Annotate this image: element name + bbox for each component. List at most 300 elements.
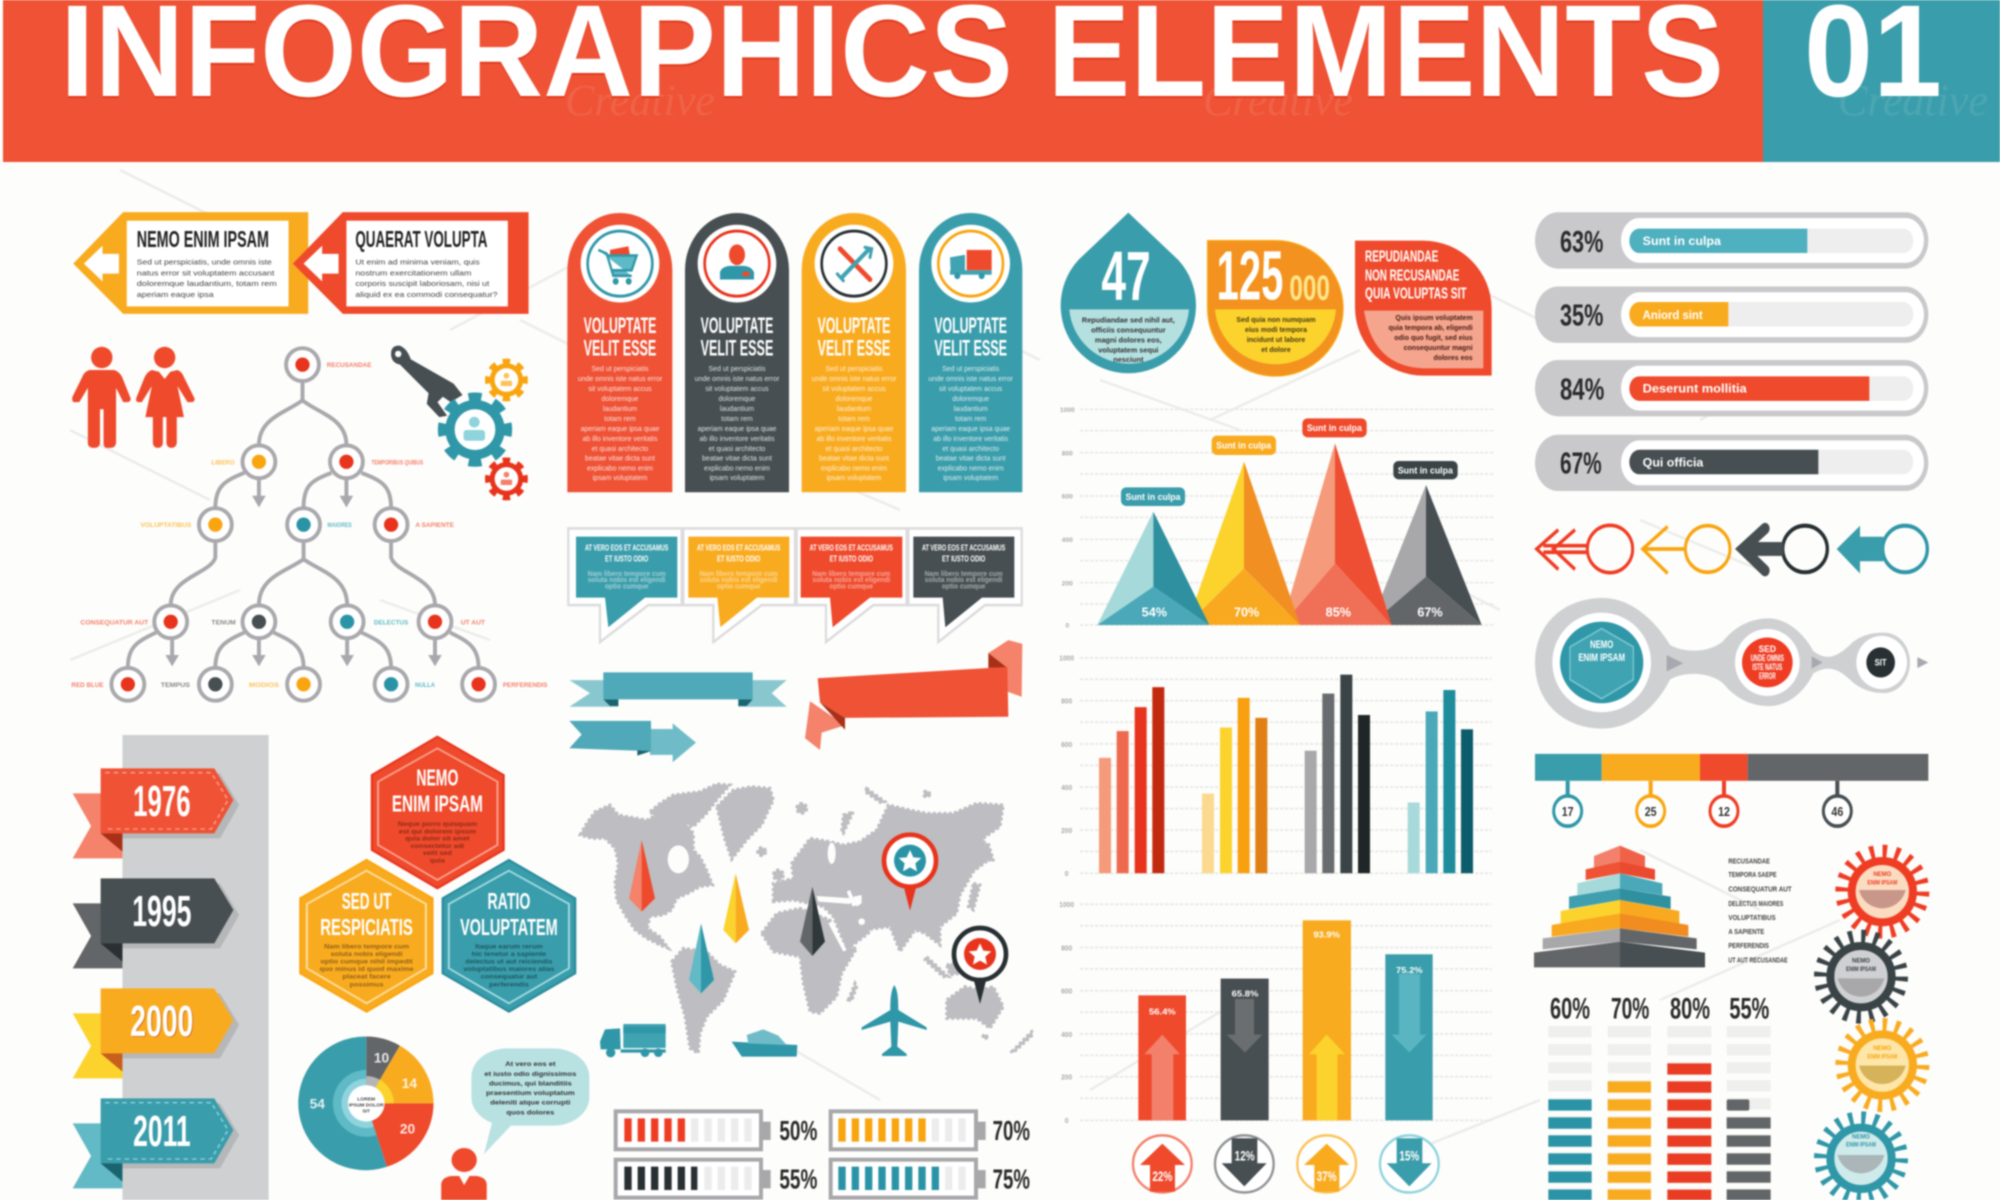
third column top: drops and triangle chart xyxy=(1060,213,1493,630)
red bars xyxy=(1099,687,1164,873)
pie chart: 14 xyxy=(402,1076,417,1091)
flow blob xyxy=(1535,598,1928,729)
drop: orange 125 000 xyxy=(1208,236,1343,376)
yellow arrow tag: doloremque laudantium, totam rem xyxy=(137,279,277,288)
ribbon: red banner xyxy=(805,640,1022,750)
pyramid legend: TEMPORA SAEPE xyxy=(1728,872,1777,879)
bar: yellow up xyxy=(1303,920,1351,1120)
hexagon: red: NEMO xyxy=(416,765,458,791)
icon: person xyxy=(720,244,754,280)
panel: yellow arch: totam rem xyxy=(838,413,870,423)
header banner xyxy=(3,0,2000,162)
drop: orange 125 000: Sed quia non numquam xyxy=(1236,317,1316,324)
pyramid legend: DELECTUS MAIORES xyxy=(1728,901,1784,908)
speech box: red: AT VERO EOS ET ACCUSAMUS xyxy=(810,543,893,553)
progress bar 63%: 63% xyxy=(1560,224,1603,258)
triangle labels: 85% xyxy=(1326,606,1351,620)
progress bar 67% xyxy=(1535,435,1928,491)
right column: progress, arrows, flow, stacked bar xyxy=(1535,212,1928,826)
speech box: red: optio cumque xyxy=(830,583,873,590)
tree arrowheads xyxy=(165,496,442,666)
badge: down 15%: 15% xyxy=(1399,1148,1420,1163)
progress bar 35%: 35% xyxy=(1560,298,1603,332)
sun gear: dark: ENIM IPSAM xyxy=(1846,967,1876,973)
year ribbon 2011: 2011 xyxy=(133,1107,191,1156)
panel: red arch: unde omnis iste natus error xyxy=(578,374,663,383)
badge: down 15% xyxy=(1380,1135,1439,1192)
tree labels: DELECTUS xyxy=(374,620,408,626)
panel: teal arch: Sed ut perspiciatis xyxy=(942,364,999,373)
speech bubble: quos dolores xyxy=(506,1109,554,1116)
progress bar 84%: Deserunt mollitia xyxy=(1643,383,1748,396)
stack column 80%: 80% xyxy=(1670,992,1710,1025)
flow node: teal: NEMO xyxy=(1590,639,1613,651)
tree labels: RED BLUE xyxy=(71,683,104,689)
battery 75%: 75% xyxy=(993,1163,1030,1194)
arrow bars axis: 800 xyxy=(1061,945,1072,952)
pie chart: IPSUM DOLOR xyxy=(349,1102,384,1108)
left lower column: timeline, hexagons, pie, bubble xyxy=(73,735,589,1200)
yellow bars xyxy=(1202,698,1267,873)
panel: teal arch: sit voluptatem accus xyxy=(939,384,1003,393)
yellow arrow tag: NEMO ENIM IPSAM xyxy=(137,226,269,252)
speech box: teal: AT VERO EOS ET ACCUSAMUS xyxy=(585,543,668,553)
world map xyxy=(580,784,1033,1053)
flow node: red: SED xyxy=(1759,645,1776,654)
callout pills xyxy=(1121,418,1458,506)
speech box: dark: soluta nobis est eligendi xyxy=(925,577,1003,584)
bar: red up xyxy=(1138,995,1186,1120)
tree labels: A SAPIENTE xyxy=(415,523,454,529)
flow node: red: UNDE OMNIS xyxy=(1751,654,1784,663)
speech bubble: At vero eos et xyxy=(505,1060,556,1068)
year ribbon 2000: 2000 xyxy=(130,997,193,1046)
panel: yellow arch xyxy=(802,213,906,492)
panel: red arch xyxy=(567,213,672,492)
pyramid legend xyxy=(1728,859,1792,964)
panel: red arch: doloremque xyxy=(602,394,638,403)
sun gear: teal: ENIM IPSAM xyxy=(1846,1143,1876,1149)
panel: red arch: sit voluptatem accus xyxy=(588,384,652,393)
sun gear: dark xyxy=(1822,937,1900,1016)
battery 50% xyxy=(616,1111,817,1149)
flow node: red: ERROR xyxy=(1759,672,1776,681)
panel: yellow arch: VOLUPTATE xyxy=(818,314,890,338)
bar: yellow up: 93.9% xyxy=(1313,929,1341,940)
progress bar 84%: 84% xyxy=(1560,372,1604,406)
panel: dark arch: totam rem xyxy=(721,413,753,423)
map marker: red xyxy=(629,840,655,912)
panel: red arch: Sed ut perspiciatis xyxy=(591,364,649,373)
stack column 55% xyxy=(1727,992,1769,1200)
speech box: yellow: soluta nobis est eligendi xyxy=(700,577,778,584)
bar: teal down xyxy=(1385,954,1433,1120)
pyramid xyxy=(1534,846,1705,967)
progress bar 63%: Sunt in culpa xyxy=(1643,235,1722,248)
panel: teal arch: et quasi architecto xyxy=(942,443,999,453)
hexagon: red: est qui dolorem ipsum xyxy=(399,829,476,835)
icon: tools xyxy=(837,247,872,281)
chart axis: 600 xyxy=(1062,494,1073,501)
sun gear: teal xyxy=(1822,1119,1900,1198)
flow node: teal xyxy=(1552,613,1651,712)
hexagon: teal: VOLUPTATEM xyxy=(460,915,558,941)
hexagon: yellow xyxy=(300,860,432,1012)
battery 50%: 50% xyxy=(779,1115,817,1146)
triangle labels: 70% xyxy=(1234,606,1259,620)
drop: orange 125 000: 000 xyxy=(1289,269,1330,308)
panel: teal arch: ipsam voluptatem xyxy=(943,473,998,482)
sun gear: yellow: ENIM IPSAM xyxy=(1867,1055,1897,1061)
panel: teal arch: unde omnis iste natus error xyxy=(928,374,1013,383)
icon: red gear xyxy=(488,460,525,497)
tree labels: PERFERENDIS xyxy=(503,683,547,689)
red arrow tag: aliquid ex ea commodi consequatur? xyxy=(355,290,497,299)
panel: dark arch: Sed ut perspiciatis xyxy=(708,364,766,373)
hexagon: red: ENIM IPSAM xyxy=(392,791,483,817)
speech box: yellow xyxy=(683,528,795,642)
progress bar 84% xyxy=(1535,360,1928,416)
callout pills: Sunt in culpa xyxy=(1307,423,1363,433)
left column: tags, people, tree, gears xyxy=(71,212,547,701)
header banner: Creative xyxy=(1203,76,1353,125)
panel: yellow arch: beatae vitae dicta sunt xyxy=(819,453,889,463)
panel: red arch: totam rem xyxy=(604,413,636,423)
drop: orange 125 000: et dolore xyxy=(1261,347,1291,354)
panel: teal arch: aperiam eaque ipsa quae xyxy=(931,423,1010,433)
sun gear: red: NEMO xyxy=(1873,872,1892,878)
speech bubble: deleniti atque corrupti xyxy=(490,1099,570,1106)
yellow arrow tag: aperiam eaque ipsa xyxy=(137,290,215,299)
icon: yellow gear xyxy=(488,361,525,399)
arrow: yellow xyxy=(1643,526,1730,573)
icon: truck xyxy=(600,1024,666,1057)
year ribbon 2011 xyxy=(73,1098,239,1188)
panel: dark arch: beatae vitae dicta sunt xyxy=(702,453,772,463)
panel: teal arch xyxy=(919,213,1022,492)
speech bubble: praesentium voluptatum xyxy=(486,1089,575,1097)
battery 55%: 55% xyxy=(779,1163,817,1194)
sun gear: red: ENIM IPSAM xyxy=(1867,880,1897,886)
bar: teal down: 75.2% xyxy=(1396,965,1423,975)
icon: person xyxy=(441,1148,487,1200)
triangle: red xyxy=(1282,443,1392,625)
stacked bar xyxy=(1535,754,1928,826)
panel: dark arch: VOLUPTATE xyxy=(701,314,773,338)
speech box: teal: optio cumque xyxy=(605,583,649,590)
hexagon: yellow: placeat facere xyxy=(342,974,391,981)
bar: red up: 56.4% xyxy=(1149,1006,1176,1016)
speech bubble xyxy=(471,1048,589,1154)
speech box: red: soluta nobis est eligendi xyxy=(812,577,890,584)
tree labels: MAIORES xyxy=(327,523,352,529)
year ribbon 1995: 1995 xyxy=(132,887,192,936)
panel: teal arch: totam rem xyxy=(955,413,986,423)
panel: dark arch: sit voluptatem accus xyxy=(705,384,769,393)
drop: red text: quia tempora ab, eligendi xyxy=(1388,325,1473,332)
icon: plane xyxy=(862,985,927,1056)
panel: yellow arch: et quasi architecto xyxy=(826,443,882,453)
hexagon: red: quia xyxy=(430,858,445,865)
hexagon: teal: RATIO xyxy=(487,889,530,915)
year ribbon 1976: 1976 xyxy=(133,777,191,826)
tree labels: TEMPORIBUS QUIBUS xyxy=(371,460,423,466)
speech box: red xyxy=(797,528,907,642)
arrow: teal xyxy=(1837,526,1927,573)
yellow arrow tag xyxy=(73,212,308,314)
icon: cart xyxy=(598,246,637,285)
hexagon: red: consectetur adi xyxy=(411,843,464,850)
speech box: dark: Nam libero tempore cum xyxy=(925,571,1003,578)
marker 25: 25 xyxy=(1645,804,1657,819)
arrow bars axis: 1000 xyxy=(1059,902,1074,909)
chart axis: 800 xyxy=(1062,450,1073,457)
speech box: yellow: AT VERO EOS ET ACCUSAMUS xyxy=(697,543,780,553)
flow node: red xyxy=(1735,629,1800,696)
sun gear: yellow: NEMO xyxy=(1873,1046,1892,1052)
badge: up 37% xyxy=(1297,1135,1356,1192)
stack column 55%: 55% xyxy=(1729,992,1769,1025)
red arrow tag: corporis suscipit laboriosam, nisi ut xyxy=(355,279,490,288)
marker 12 xyxy=(1710,781,1738,826)
panel: yellow arch: aperiam eaque ipsa quae xyxy=(815,423,893,433)
stack column 60%: 60% xyxy=(1550,992,1590,1025)
panel: yellow arch: sit voluptatem accus xyxy=(822,384,886,393)
drop: teal 47: officiis consequuntur xyxy=(1091,325,1166,334)
panel: teal arch: ab illo inventore veritatis xyxy=(933,433,1008,443)
speech box: yellow: Nam libero tempore cum xyxy=(700,571,778,578)
hexagon: teal: hic tenetur a sapiente xyxy=(472,951,546,958)
year ribbon 1976 xyxy=(73,768,239,858)
chart axis: 1000 xyxy=(1060,407,1075,414)
callout pills: Sunt in culpa xyxy=(1216,441,1272,451)
map seas xyxy=(668,843,865,952)
drop: teal 47: voluptatem sequi xyxy=(1098,345,1158,354)
drop: red text xyxy=(1355,241,1492,376)
panel: dark arch: ipsam voluptatem xyxy=(710,473,764,482)
panel: teal arch: VOLUPTATE xyxy=(934,314,1007,338)
drop: orange 125 000: incidunt ut labore xyxy=(1247,337,1305,344)
hexagon: teal: perferendis xyxy=(489,982,529,988)
speech box: teal: ET IUSTO ODIO xyxy=(605,554,648,563)
chart: grouped bars xyxy=(1059,656,1492,878)
panel: dark arch: doloremque xyxy=(719,394,755,403)
triangle chart xyxy=(1060,407,1493,630)
panel: red arch: VELIT ESSE xyxy=(584,336,656,361)
callout pills: Sunt in culpa xyxy=(1398,465,1454,475)
hexagon: yellow: soluta nobis eligendi xyxy=(331,951,403,958)
flow node: dark: SIT xyxy=(1875,658,1887,668)
hexagon: yellow: optio cumque nihil impedit xyxy=(320,959,413,966)
hexagon: red: Neque porro quisquam xyxy=(398,821,477,828)
speech box: teal xyxy=(568,528,682,642)
red arrow tag: Ut enim ad minima veniam, quis xyxy=(355,258,480,267)
bars axis: 800 xyxy=(1061,698,1072,706)
triangle labels xyxy=(1142,606,1443,620)
battery 70%: 70% xyxy=(993,1115,1030,1146)
speech box: yellow: optio cumque xyxy=(717,583,761,590)
chart grid xyxy=(1080,409,1493,625)
panel: red arch: ab illo inventore veritatis xyxy=(583,433,658,443)
panel: red arch: et quasi architecto xyxy=(592,443,648,453)
pie chart: 10 xyxy=(374,1050,390,1065)
flow node: red: ISTE NATUS xyxy=(1752,663,1783,672)
bars axis: 1000 xyxy=(1059,656,1074,663)
progress bar 35% xyxy=(1535,287,1928,343)
chart axis: 0 xyxy=(1065,623,1069,630)
speech box: teal: Nam libero tempore cum xyxy=(588,571,666,578)
speech box: red: Nam libero tempore cum xyxy=(812,571,890,578)
hexagon: teal xyxy=(443,860,575,1012)
hexagon: red xyxy=(372,737,504,888)
panel: teal arch: laudantium xyxy=(954,403,988,413)
hexagon: red: quia dolor sit amet xyxy=(405,836,470,843)
tree connectors xyxy=(128,381,479,667)
marker 25 xyxy=(1637,781,1665,826)
panel: red arch: VOLUPTATE xyxy=(584,314,656,338)
hexagon: yellow: Nam libero tempore cum xyxy=(324,944,409,951)
panel: yellow arch: Sed ut perspiciatis xyxy=(825,364,883,373)
panel: red arch: explicabo nemo enim xyxy=(587,463,653,472)
panel: dark arch: ab illo inventore veritatis xyxy=(700,433,775,443)
centre column: arch panels, speech boxes, ribbons xyxy=(567,213,1022,762)
arrow bars axis xyxy=(1059,902,1074,1125)
year ribbon 1995 xyxy=(73,878,239,968)
drop: red text: NON RECUSANDAE xyxy=(1365,268,1459,285)
panel: dark arch: unde omnis iste natus error xyxy=(695,374,780,383)
sun gear: dark: NEMO xyxy=(1852,959,1870,965)
panel: yellow arch: doloremque xyxy=(836,394,872,403)
triangle: teal xyxy=(1097,512,1209,625)
drop: red text: consequuntur magni xyxy=(1404,345,1473,352)
panel: yellow arch: unde omnis iste natus error xyxy=(812,374,897,383)
year ribbon 2000 xyxy=(73,988,239,1078)
dark bars xyxy=(1305,675,1370,873)
icon: wrench and gears xyxy=(391,346,525,497)
tree labels: RECUSANDAE xyxy=(327,363,371,369)
pyramid legend: A SAPIENTE xyxy=(1728,929,1765,936)
hexagon: yellow: RESPICIATIS xyxy=(320,915,413,941)
pyramid legend: PERFERENDIS xyxy=(1728,943,1769,950)
triangle labels: 54% xyxy=(1142,606,1167,620)
right column lower: pyramid, stacks, sun gears xyxy=(1534,846,1922,1200)
flow node: dark xyxy=(1856,636,1907,689)
arrow bars grid xyxy=(1080,904,1492,1120)
triangle labels: 67% xyxy=(1417,606,1443,620)
speech box: dark: AT VERO EOS ET ACCUSAMUS xyxy=(922,543,1005,553)
panel: red arch: laudantium xyxy=(603,403,637,413)
icon: truck xyxy=(950,250,992,279)
pyramid legend: VOLUPTATIBUS xyxy=(1728,915,1776,922)
pie chart: SIT xyxy=(362,1108,370,1114)
ribbon: teal banner xyxy=(569,672,787,707)
hexagon: yellow: possimus xyxy=(350,982,384,988)
chart axis xyxy=(1060,407,1075,630)
tree nodes xyxy=(111,348,495,701)
badge: down 12%: 12% xyxy=(1235,1148,1255,1163)
panel: dark arch: explicabo nemo enim xyxy=(704,463,770,472)
yellow arrow tag: Sed ut perspiciatis, unde omnis iste xyxy=(137,258,272,267)
badge: down 12% xyxy=(1215,1135,1274,1192)
progress bar 63% xyxy=(1535,212,1928,269)
pyramid legend: CONSEQUATUR AUT xyxy=(1728,886,1792,893)
hexagon: teal: consequatur aut xyxy=(481,974,538,981)
speech box: dark: optio cumque xyxy=(942,583,986,590)
sun gear: teal: NEMO xyxy=(1852,1134,1870,1140)
panel: dark arch: laudantium xyxy=(720,403,754,413)
panel: teal arch: VELIT ESSE xyxy=(934,336,1007,361)
yellow arrow tag: natus error sit voluptatem accusant xyxy=(137,268,275,277)
marker 46: 46 xyxy=(1831,804,1844,819)
drop: teal 47: 47 xyxy=(1101,237,1151,315)
map marker: yellow xyxy=(723,873,749,943)
hexagon: teal: voluptatibus maiores alias xyxy=(463,966,555,973)
location pin: red xyxy=(884,835,936,911)
arrow bars axis: 600 xyxy=(1061,988,1072,996)
drop: red text: dolores eos xyxy=(1433,355,1473,362)
bars axis: 200 xyxy=(1061,828,1072,835)
badge: up 22%: 22% xyxy=(1152,1169,1173,1184)
header banner: Creative xyxy=(565,76,715,125)
drop: red text: QUIA VOLUPTAS SIT xyxy=(1365,286,1467,303)
drop: teal 47: Repudiandae sed nihil aut, xyxy=(1082,315,1175,324)
progress bar 35%: Aniord sint xyxy=(1643,309,1703,322)
bars grid xyxy=(1080,658,1492,873)
pie chart: 54 xyxy=(310,1097,325,1112)
teal bars xyxy=(1408,690,1473,873)
drop: red text: odio quo fugit, sed eius xyxy=(1394,335,1473,342)
hexagon: teal: Itaque earum rerum xyxy=(475,944,543,951)
speech box: red: ET IUSTO ODIO xyxy=(830,554,873,563)
panel: yellow arch: ipsam voluptatem xyxy=(827,473,881,482)
speech box: teal: soluta nobis est eligendi xyxy=(588,577,666,584)
progress bar 67%: Qui officia xyxy=(1643,457,1704,470)
triangle: dark xyxy=(1370,485,1482,625)
panel: yellow arch: ab illo inventore veritatis xyxy=(817,433,892,443)
panel: dark arch: et quasi architecto xyxy=(709,443,765,453)
hexagon: yellow: quo minus id quod maxime xyxy=(320,966,414,973)
map marker: dark xyxy=(800,887,825,956)
drop: red text: REPUDIANDAE xyxy=(1365,249,1438,266)
marker 17: 17 xyxy=(1562,804,1574,819)
marker 12: 12 xyxy=(1718,804,1730,819)
chart axis: 400 xyxy=(1062,537,1073,544)
bars axis: 400 xyxy=(1061,785,1072,792)
pie chart: LOREM xyxy=(357,1096,375,1102)
battery 55% xyxy=(616,1160,817,1198)
tree labels: UT AUT xyxy=(461,620,485,626)
panel: yellow arch: explicabo nemo enim xyxy=(821,463,887,472)
chart: arrow bars xyxy=(1059,902,1492,1125)
pyramid legend: UT AUT RECUSANDAE xyxy=(1728,957,1788,964)
drop: orange 125 000: eius modi tempora xyxy=(1245,327,1307,334)
bars axis: 600 xyxy=(1061,742,1072,749)
marker 46 xyxy=(1823,781,1851,826)
pie chart: 20 xyxy=(400,1122,416,1137)
hexagon: teal: delectus ut aut reiciendis xyxy=(465,959,553,966)
location pin: dark xyxy=(954,928,1006,1004)
tree dots xyxy=(121,357,486,691)
bars axis xyxy=(1059,656,1074,878)
marker 17 xyxy=(1554,781,1582,826)
speech bubble: ducimus, qui blanditiis xyxy=(489,1080,572,1087)
map marker: teal xyxy=(689,923,714,993)
progress bar 67%: 67% xyxy=(1560,446,1602,480)
panel: dark arch: VELIT ESSE xyxy=(701,336,773,361)
battery 75% xyxy=(831,1160,1030,1198)
drop: teal 47: magni dolores eos, xyxy=(1095,335,1162,344)
sun gear: yellow xyxy=(1843,1026,1922,1104)
